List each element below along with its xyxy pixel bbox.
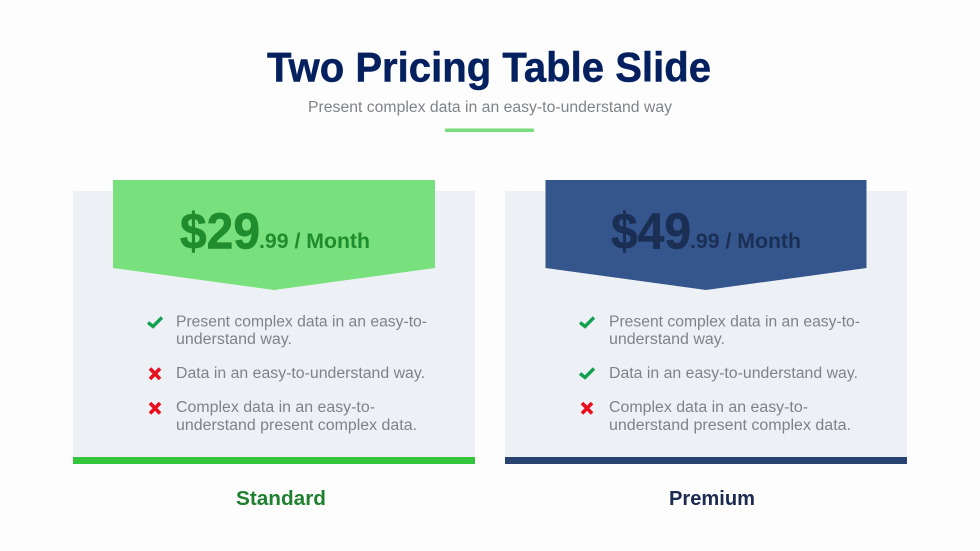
- price: [611, 202, 801, 260]
- bottom accent bar: [73, 457, 475, 464]
- icon: check: [580, 368, 594, 378]
- price: $49: [611, 202, 691, 260]
- feature list: [148, 314, 427, 434]
- feature text: Present complex data in an easy-to-: [176, 314, 427, 330]
- feature text continued: understand present complex data.: [609, 417, 851, 434]
- feature text: Data in an easy-to-understand way.: [609, 365, 858, 382]
- feature text: Complex data in an easy-to-: [176, 399, 375, 416]
- feature text: Present complex data in an easy-to-: [609, 314, 860, 330]
- feature text: Complex data in an easy-to-: [609, 399, 808, 416]
- feature text: Data in an easy-to-understand way.: [176, 365, 425, 382]
- panel background: [505, 191, 907, 457]
- subtitle: Present complex data in an easy-to-understand way: [308, 99, 672, 116]
- bottom accent bar: [505, 457, 907, 464]
- title underline: [445, 128, 534, 132]
- feature list: [580, 314, 860, 434]
- price: .99 / Month: [259, 230, 370, 253]
- price: .99 / Month: [690, 230, 801, 253]
- panel: premium plan: [505, 180, 907, 464]
- icon: check: [148, 318, 162, 326]
- feature text continued: understand way.: [609, 331, 725, 348]
- icon: cross: [150, 368, 160, 379]
- price banner: [546, 180, 866, 290]
- icon: cross: [582, 403, 592, 414]
- panel background: [73, 191, 475, 457]
- feature text continued: understand present complex data.: [176, 417, 417, 434]
- title: Two Pricing Table Slide: [267, 44, 711, 90]
- price banner: [113, 180, 435, 290]
- plan label: premium: Premium: [669, 487, 755, 510]
- price: [180, 202, 370, 260]
- icon: cross: [150, 403, 160, 414]
- plan label: standard: Standard: [236, 487, 326, 510]
- price: $29: [180, 202, 260, 260]
- feature text continued: understand way.: [176, 331, 292, 348]
- icon: check: [580, 318, 594, 326]
- panel: standard plan: [73, 180, 475, 464]
